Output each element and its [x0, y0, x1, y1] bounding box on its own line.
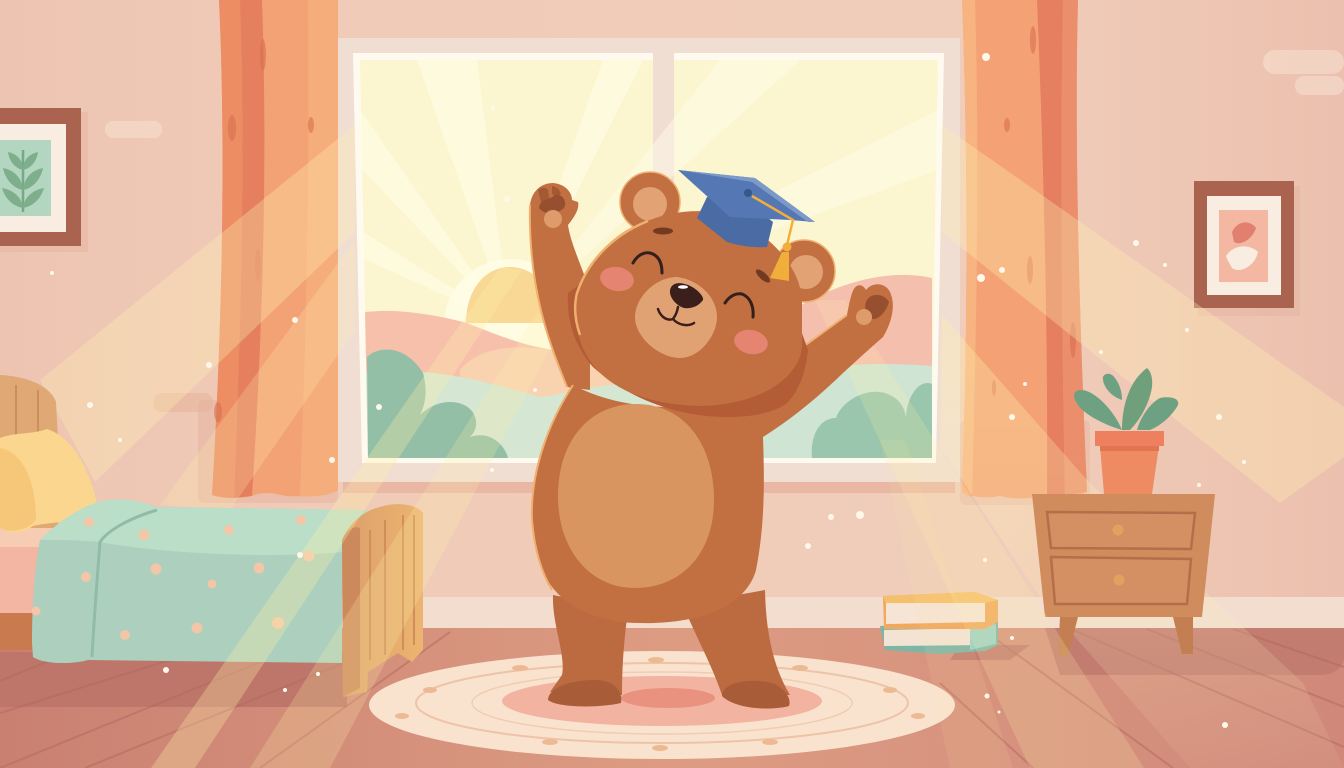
headboard [0, 375, 58, 545]
picture: leaf frame [0, 108, 88, 252]
blanket dots [32, 515, 314, 640]
right ear [773, 240, 835, 302]
floor [0, 628, 1344, 768]
knobs [1112, 524, 1124, 536]
wall [0, 0, 1344, 600]
glass and landscape [360, 60, 938, 458]
bushes left [367, 350, 508, 458]
left pane frame [353, 53, 653, 463]
plant leaves [1074, 368, 1178, 430]
right paw details [856, 295, 889, 325]
curtain marks [214, 39, 314, 422]
mouth [658, 307, 694, 325]
belly [558, 404, 714, 588]
upper book [883, 592, 998, 629]
bushes right [812, 383, 932, 458]
torso highlight [532, 385, 573, 590]
left arm highlight [530, 205, 567, 387]
legs [1058, 617, 1193, 656]
curtain shadow [198, 400, 338, 503]
pale green hill left [366, 371, 653, 458]
mattress [0, 528, 60, 548]
books [880, 592, 998, 654]
bed [0, 375, 423, 697]
pale green hill right [752, 364, 932, 458]
tassel [752, 196, 793, 245]
nightstand floor shadow [1045, 628, 1344, 675]
eyebrows [653, 228, 772, 285]
pink hill left [365, 311, 653, 458]
lower book [880, 622, 998, 654]
glass [360, 60, 938, 458]
bear [530, 170, 893, 709]
bed floor shadow [0, 652, 347, 707]
cabinet [1032, 494, 1215, 617]
right arm [763, 284, 893, 437]
eyes [633, 253, 753, 317]
pot [1100, 446, 1159, 494]
light stripes over bed and floor [151, 267, 1144, 768]
blanket top [40, 500, 367, 555]
peach hill [460, 347, 653, 440]
head highlight [575, 221, 648, 335]
sun [466, 267, 556, 323]
left paw details [538, 186, 565, 228]
baseboard [0, 597, 1344, 629]
left arm [530, 183, 590, 390]
legs [550, 595, 628, 695]
collar shadow [568, 270, 808, 417]
cheeks [598, 264, 770, 357]
rug [369, 651, 955, 759]
picture: flower frame [1194, 181, 1300, 316]
right arm highlight [803, 315, 847, 347]
books floor shadow [950, 645, 1030, 660]
muzzle [635, 277, 717, 358]
pillow [0, 429, 96, 532]
blanket [32, 500, 367, 663]
right curtain [960, 0, 1090, 505]
head [576, 211, 802, 406]
right pane frame [674, 53, 944, 463]
footboard [342, 504, 423, 697]
left curtain [198, 0, 338, 503]
window [338, 38, 960, 493]
nose [670, 283, 703, 308]
window frame [338, 38, 960, 482]
dust particles [50, 53, 1246, 728]
feet [548, 680, 621, 706]
torso [532, 380, 790, 623]
graduation cap [678, 170, 815, 281]
glow and rays [360, 60, 938, 391]
left ear [620, 172, 680, 232]
under-sill shadow [343, 482, 955, 493]
pink hill right [760, 275, 932, 458]
nightstand with plant [1032, 368, 1215, 656]
blanket fold [92, 510, 157, 657]
wall clouds [105, 50, 1344, 412]
